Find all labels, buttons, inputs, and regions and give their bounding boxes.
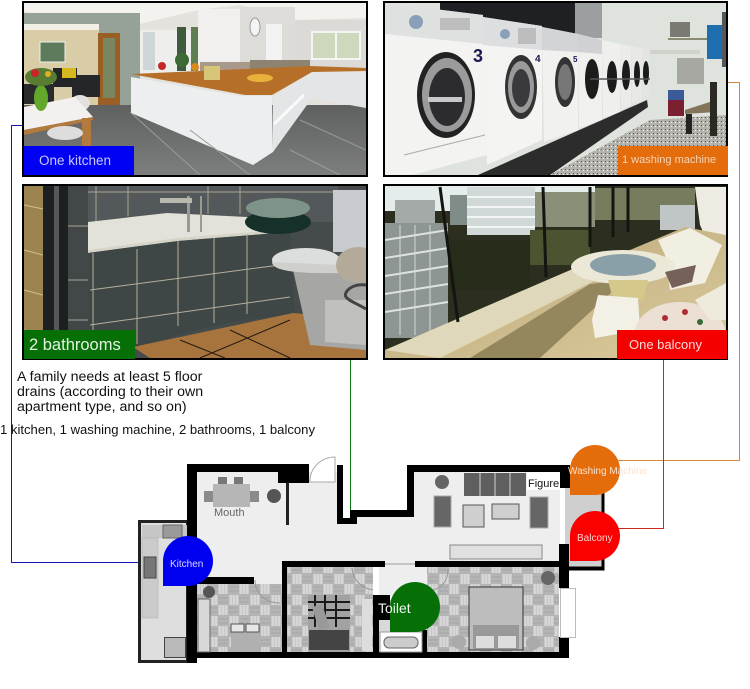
kitchen fittings xyxy=(142,525,187,658)
room: living and dining floor xyxy=(197,472,560,595)
door: entrance xyxy=(310,457,335,482)
room: kitchen xyxy=(140,522,188,662)
text block: family needs drains: drains (according to their own xyxy=(17,384,203,400)
marker: toilet xyxy=(378,582,440,632)
furniture: bedroom two xyxy=(308,595,372,652)
room: master bedroom xyxy=(427,567,559,653)
panel: balcony photo xyxy=(384,184,728,368)
text block: drain breakdown: 1 kitchen, 1 washing machine, 2 bathrooms, 1 balcony xyxy=(0,422,315,437)
panel: washing machine photo xyxy=(384,2,728,176)
label: one washing machine: 1 washing machine xyxy=(622,154,716,166)
label: one kitchen: One kitchen xyxy=(39,153,111,168)
label: figure: Figure xyxy=(528,478,559,490)
furniture: bedroom one xyxy=(198,586,261,652)
marker: balcony: Balcony xyxy=(577,533,613,544)
connector: bathroom line xyxy=(350,360,380,606)
marker: washing machine: Washing Machine xyxy=(568,466,648,477)
label: one washing machine xyxy=(618,146,728,175)
room: bedroom two xyxy=(287,567,373,652)
marker: kitchen xyxy=(163,536,213,586)
furniture: living room xyxy=(434,473,548,559)
marker: washing machine xyxy=(568,445,648,495)
furniture: bathtub xyxy=(380,632,422,652)
label: 2 bathrooms xyxy=(24,330,135,359)
label: mouth: Mouth xyxy=(214,507,245,519)
connector: washing machine line xyxy=(618,82,740,460)
text block: family needs drains: A family needs at least 5 floor xyxy=(17,369,203,385)
panel: washing machine photo: 3 xyxy=(473,46,483,66)
connector: kitchen line xyxy=(12,126,164,562)
panel: kitchen photo xyxy=(22,2,368,176)
text block: family needs drains xyxy=(17,369,203,415)
connector: balcony line xyxy=(618,360,664,528)
label: one balcony: One balcony xyxy=(629,337,702,352)
window: master bedroom xyxy=(560,588,576,638)
marker: toilet: Toilet xyxy=(378,600,411,616)
label: figure xyxy=(527,472,560,490)
marker: balcony xyxy=(570,511,620,561)
panel: washing machine photo: 4 xyxy=(535,54,541,65)
floor plan xyxy=(140,457,604,663)
door: hall swing arcs xyxy=(255,564,448,603)
text block: family needs drains: apartment type, and so on) xyxy=(17,399,187,415)
label: one balcony xyxy=(617,330,727,359)
label: 2 bathrooms: 2 bathrooms xyxy=(29,336,121,354)
room: bedroom one xyxy=(197,584,282,652)
furniture: dining set xyxy=(204,477,281,507)
room: balcony floor xyxy=(565,488,602,567)
panel: washing machine photo: 5 xyxy=(573,55,578,64)
room: bathroom strip xyxy=(379,600,422,653)
furniture: master bed xyxy=(452,571,555,650)
panel: bathroom photo xyxy=(22,184,380,360)
label: one kitchen xyxy=(24,146,134,175)
marker: kitchen: Kitchen xyxy=(170,559,203,570)
walls xyxy=(187,464,570,663)
